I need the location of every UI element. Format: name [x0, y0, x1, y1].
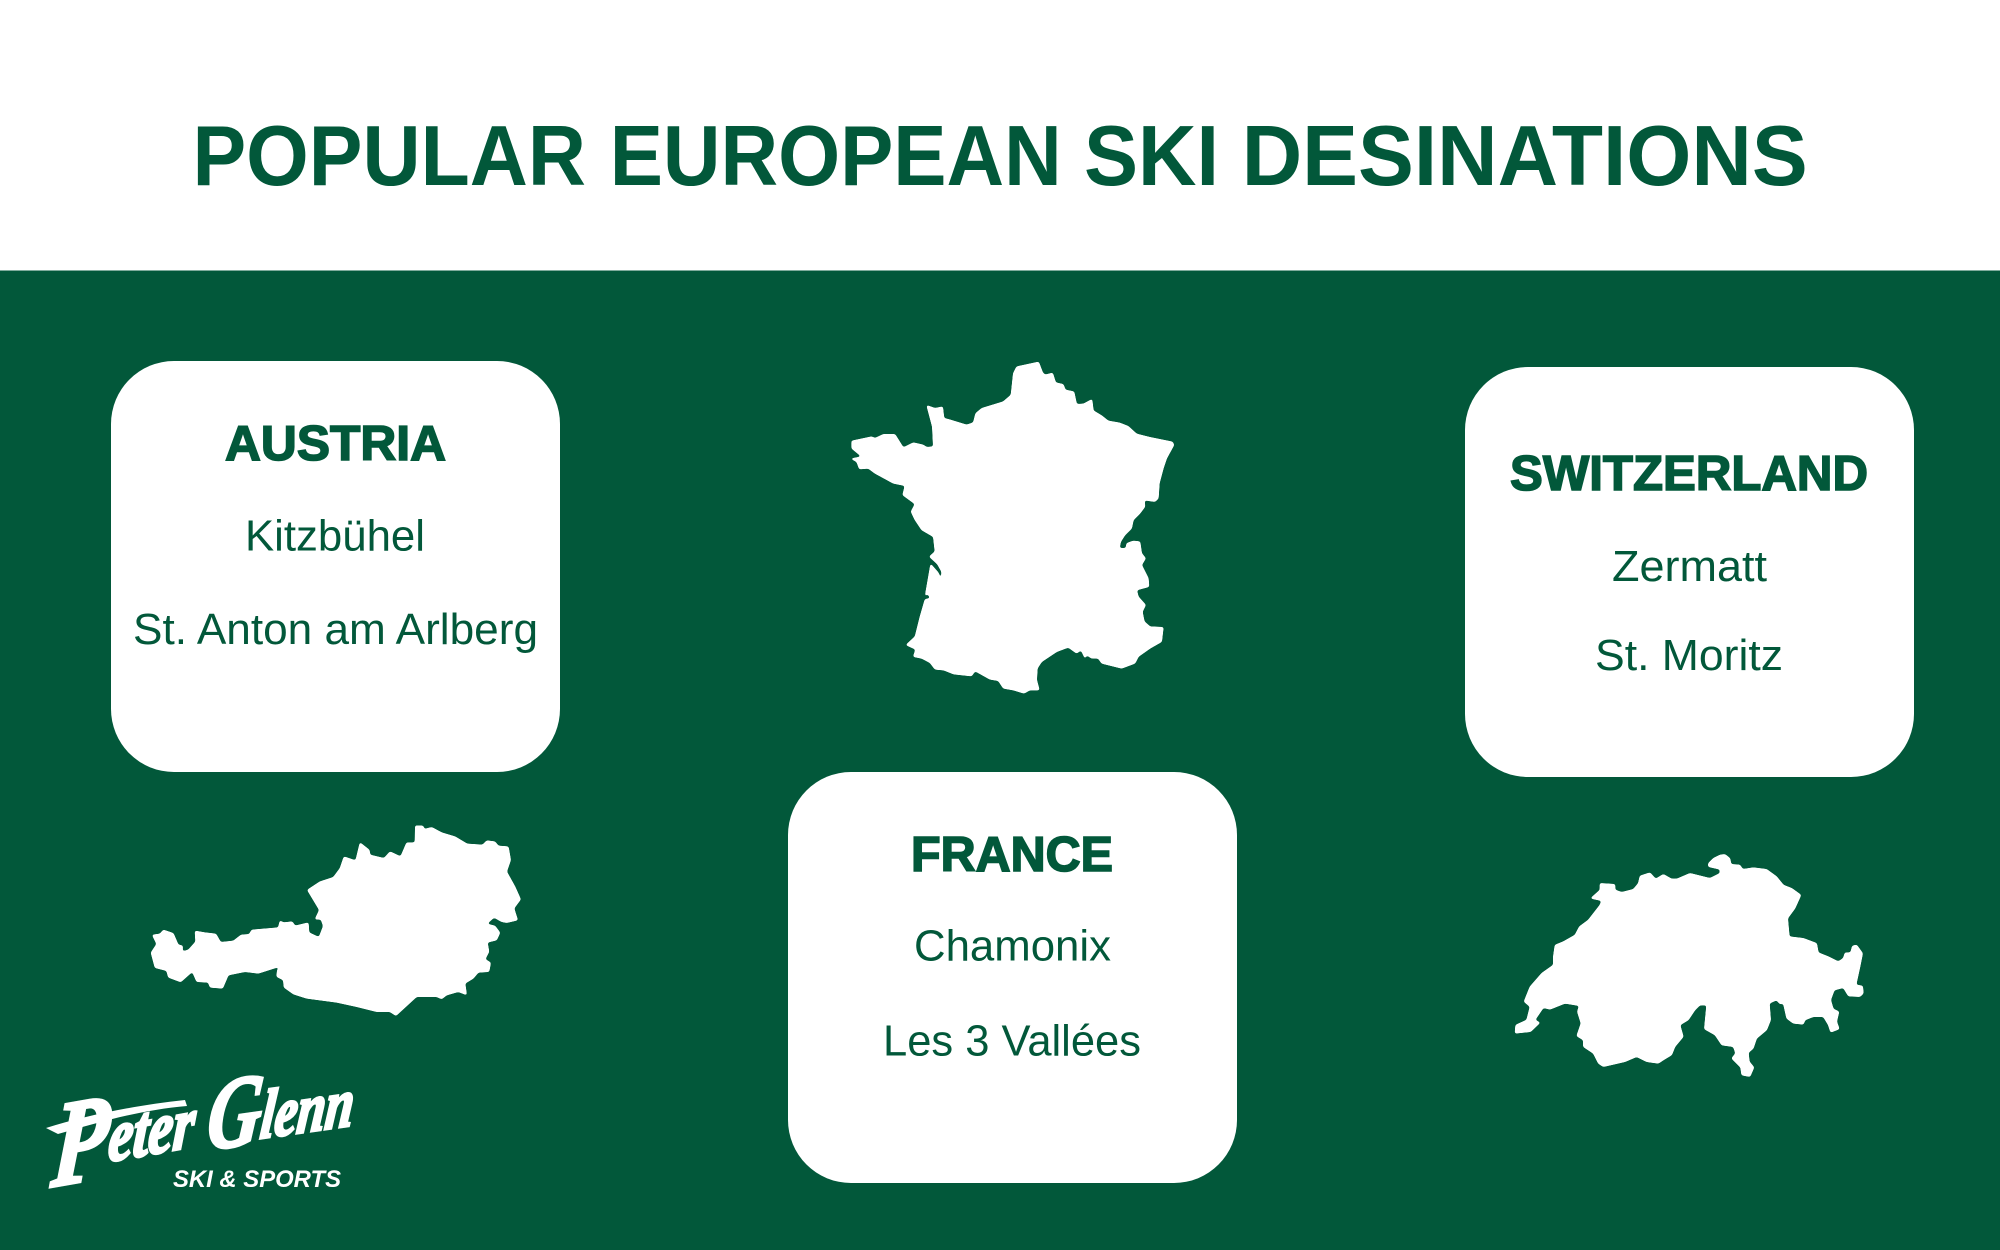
panel: Switzerland: [1465, 367, 1914, 777]
Austria resort: Kitzbühel: Kitzbühel: [245, 512, 425, 561]
title: POPULAR: [192, 109, 586, 204]
panel: Austria: [111, 361, 560, 772]
logo wordmark: Glenn: G: [203, 1053, 268, 1173]
France card background: [788, 772, 1237, 1183]
Austria resort: St. Anton am Arlberg: St. Anton am Arlberg: [133, 605, 538, 654]
green background panel: [0, 270, 2000, 1250]
logo wordmark: Peter: P: [48, 1067, 114, 1214]
logo tagline: SKI & SPORTS: [173, 1166, 341, 1193]
title: DESINATIONS: [1242, 109, 1808, 204]
France heading: FRANCE: [911, 827, 1113, 882]
panel: France: [788, 772, 1237, 1183]
France resort: Les 3 Vallées: Les 3 Vallées: [883, 1016, 1141, 1065]
Switzerland heading: SWITZERLAND: [1510, 446, 1868, 501]
Switzerland card background: [1465, 367, 1914, 777]
Switzerland resort: St. Moritz: St. Moritz: [1595, 631, 1783, 680]
Switzerland resort: Zermatt: Zermatt: [1612, 542, 1767, 591]
icon: map of Switzerland: [1515, 854, 1863, 1077]
logo wordmark: Peter: eter: [106, 1081, 199, 1179]
Austria heading: AUSTRIA: [225, 416, 446, 471]
title: EUROPEAN: [610, 109, 1062, 204]
logo: Peter Glenn Ski & Sports: [46, 1040, 361, 1214]
logo wordmark: Glenn: lenn: [257, 1064, 358, 1154]
Austria card background: [111, 361, 560, 772]
logo swash: [46, 1100, 187, 1134]
France resort: Chamonix: Chamonix: [914, 922, 1111, 971]
title: SKI: [1084, 109, 1219, 204]
icon: map of Austria: [151, 826, 521, 1016]
icon: map of France: [851, 362, 1174, 693]
title: [192, 109, 1808, 204]
